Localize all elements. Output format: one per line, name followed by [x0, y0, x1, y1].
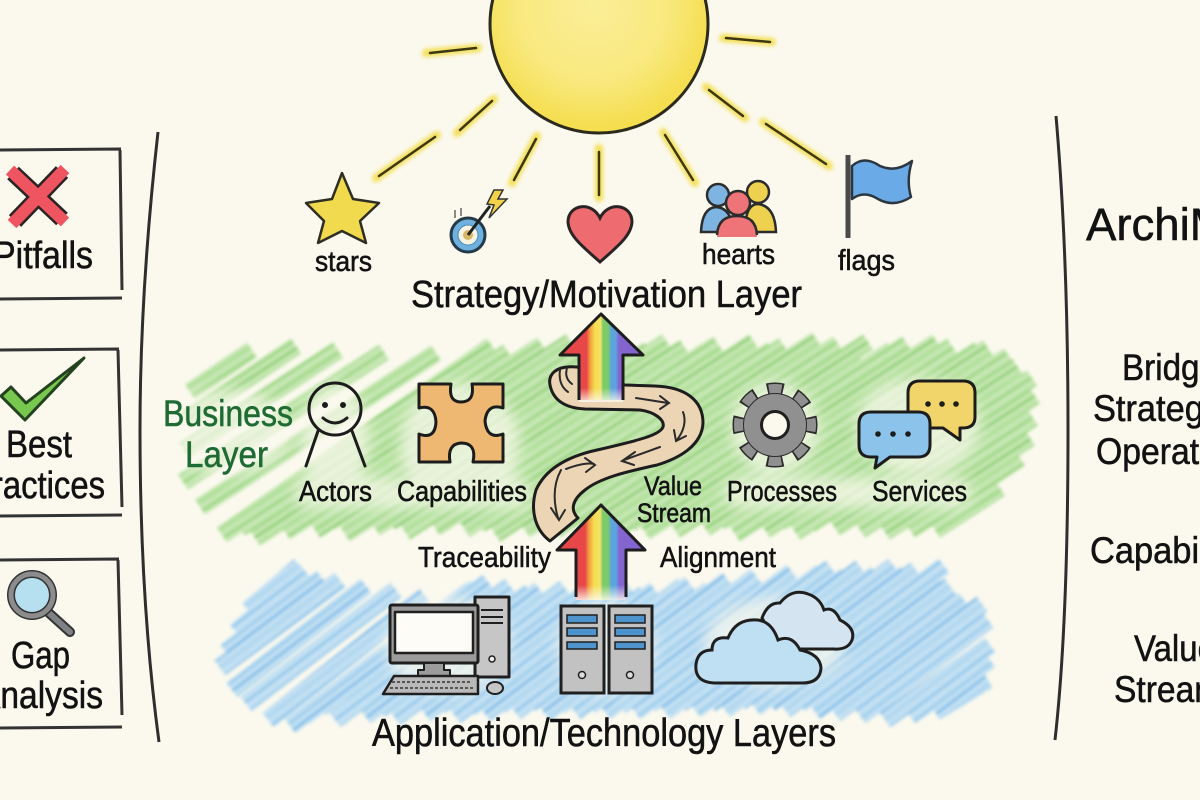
heading: application technology layers: Application/Technology Layers [372, 712, 836, 755]
business layer content [163, 367, 975, 541]
icon: star [306, 173, 379, 243]
text: bridge strategy operations [1093, 347, 1200, 472]
pale halos around icons and labels [166, 378, 980, 694]
label: value stream: Stream [637, 498, 711, 528]
label: value stream: Value [644, 471, 702, 501]
sun [376, 0, 829, 198]
heading: strategy layer: Strategy/Motivation Layer [411, 274, 802, 316]
panel: right summary [1086, 199, 1200, 710]
icon: heart [568, 207, 632, 262]
label: processes: Processes [727, 476, 837, 508]
left divider [140, 132, 159, 742]
right divider [1055, 116, 1068, 740]
band: business layer [183, 340, 1035, 538]
label: capabilities: Capabilities [397, 476, 527, 508]
icon: server racks [561, 606, 652, 693]
heading: business layer [163, 393, 293, 475]
label: traceability: Traceability [418, 542, 551, 574]
card: pitfalls [0, 149, 122, 299]
label: flags: flags [838, 245, 895, 277]
band: application technology layers [220, 566, 990, 726]
icon: value stream path [534, 367, 703, 541]
strategy icons [306, 155, 912, 316]
label: best: Best [6, 424, 72, 466]
icon: red cross [10, 169, 65, 224]
heading: business layer: Layer [185, 434, 268, 475]
icon: computer [383, 597, 509, 694]
icon: magnifier [11, 574, 70, 632]
label: stars: stars [315, 246, 372, 278]
text: value streams [1114, 628, 1200, 710]
icon: gear [732, 382, 818, 468]
arrow: lower rainbow [557, 505, 645, 600]
label: gap: Gap [11, 635, 70, 677]
label: services: Services [872, 476, 967, 508]
label: value stream [637, 471, 711, 528]
card: gap analysis [0, 559, 122, 728]
technology layer content [372, 592, 853, 755]
icon: green check [1, 358, 84, 420]
label: actors: Actors [299, 476, 372, 508]
arrow: upper rainbow [560, 314, 643, 402]
heading: business layer: Business [163, 393, 293, 434]
label: hearts: hearts [702, 239, 775, 271]
icon: speech bubbles [859, 381, 975, 468]
icon: actor [306, 383, 365, 466]
icon: puzzle piece [419, 384, 503, 462]
sun rays [376, 38, 829, 198]
panel: left cards [0, 149, 122, 728]
card: best practices [0, 349, 122, 516]
icon: flag [848, 155, 912, 238]
icon: people [701, 181, 776, 237]
icon: clouds [696, 592, 853, 683]
icon: target [451, 190, 507, 252]
flow arrows on path [551, 368, 686, 520]
label: alignment: Alignment [660, 542, 776, 574]
